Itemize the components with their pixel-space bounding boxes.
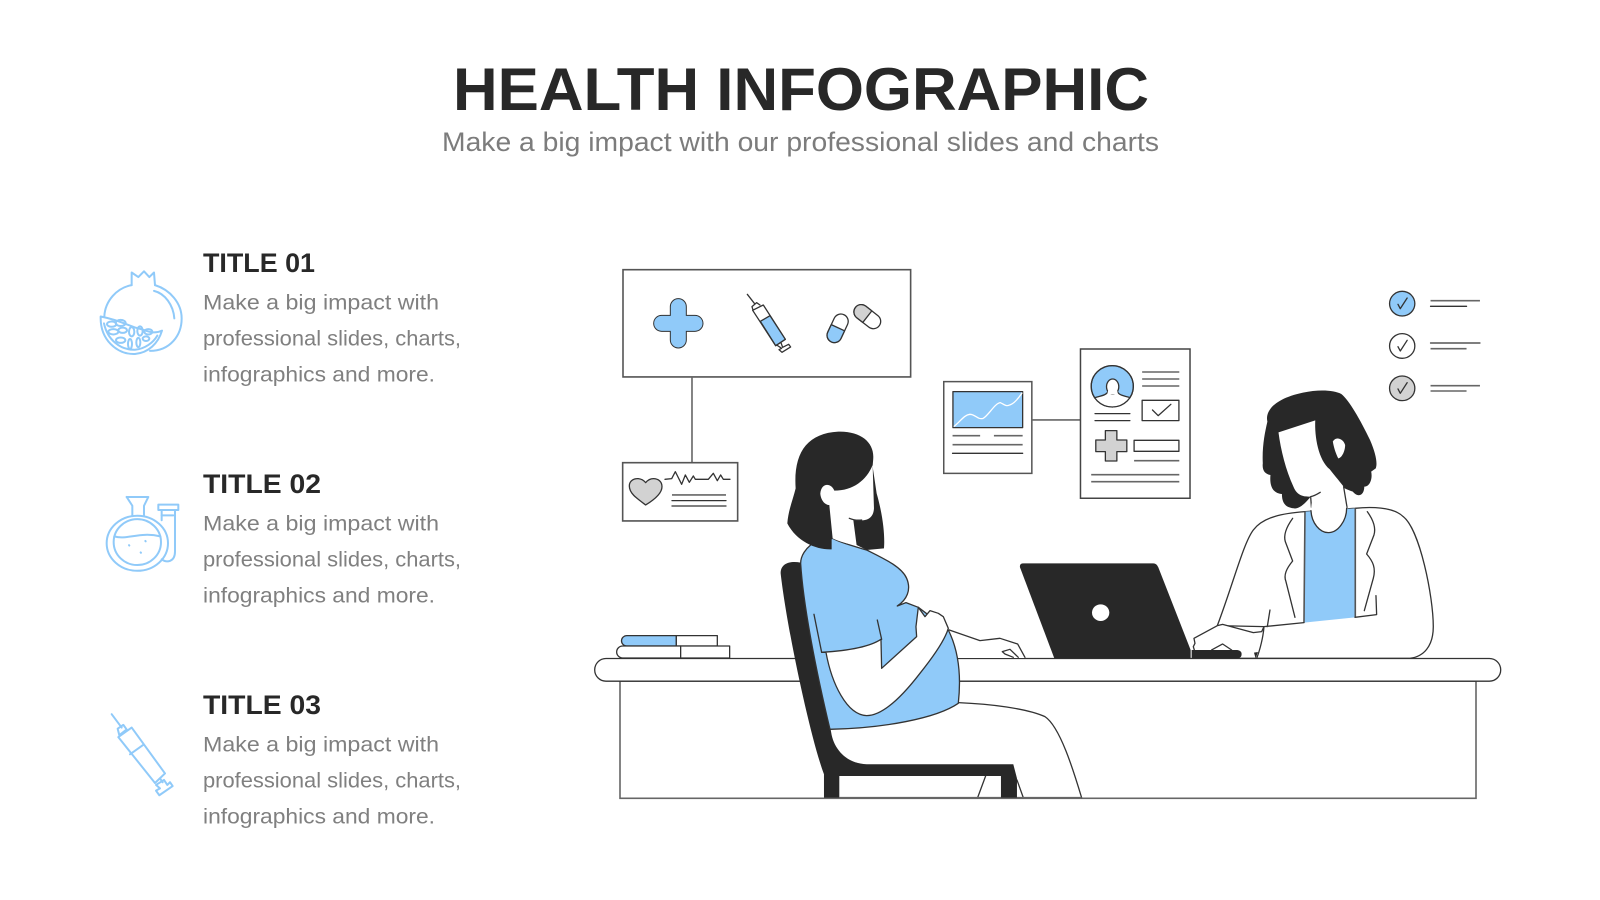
- item 01 text: infographics and more.: [203, 362, 435, 386]
- panel: heart monitor card: [623, 463, 738, 521]
- title: HEALTH INFOGRAPHIC: [453, 56, 1149, 123]
- item 01 text: [203, 248, 461, 386]
- item 02 text: infographics and more.: [203, 584, 435, 608]
- doctor hand: [1193, 624, 1264, 658]
- icon: syringe: [747, 294, 791, 352]
- illustration: doctor: [1192, 391, 1433, 658]
- item 02 text: professional slides, charts,: [203, 548, 461, 572]
- item 03 text: [203, 690, 461, 828]
- panel: chart document and patient record: [944, 349, 1190, 498]
- icon: flask and test tube: [107, 497, 178, 571]
- keyboard edge: [1192, 650, 1242, 658]
- doctor neckline: [1311, 503, 1347, 533]
- icon: syringe outline: [112, 714, 173, 795]
- chair: [781, 562, 1017, 798]
- item 02 text: TITLE 02: [203, 469, 321, 499]
- patient legs: [830, 703, 1082, 798]
- icon: pills: [825, 302, 884, 345]
- icon: medical cross: [662, 307, 695, 340]
- illustration: laptop: [1020, 563, 1191, 658]
- illustration: patient: [781, 432, 1082, 798]
- doctor hair and face: [1263, 391, 1376, 509]
- patient far arm on desk: [949, 630, 1025, 658]
- item 03 text: TITLE 03: [203, 690, 321, 720]
- panel: medicine sign: [623, 270, 911, 463]
- subtitle: Make a big impact with our professional slides and charts: [442, 127, 1159, 157]
- item 02 text: Make a big impact with: [203, 512, 439, 536]
- item 03 text: professional slides, charts,: [203, 768, 461, 792]
- item 03 text: infographics and more.: [203, 804, 435, 828]
- illustration: desk: [595, 658, 1501, 798]
- patient hair and face: [787, 432, 884, 550]
- checklist: [1390, 291, 1480, 401]
- item 01 text: Make a big impact with: [203, 290, 439, 314]
- patient shirt: [801, 538, 960, 729]
- books on desk: [617, 636, 730, 658]
- icon: pomegranate: [101, 271, 182, 354]
- item 02 text: [203, 469, 461, 608]
- doctor coat and top: [1192, 508, 1433, 658]
- item 01 text: TITLE 01: [203, 248, 315, 278]
- patient arm: [822, 607, 948, 716]
- item 03 text: Make a big impact with: [203, 732, 439, 756]
- item 01 text: professional slides, charts,: [203, 326, 461, 350]
- icon: patient avatar: [1090, 366, 1134, 410]
